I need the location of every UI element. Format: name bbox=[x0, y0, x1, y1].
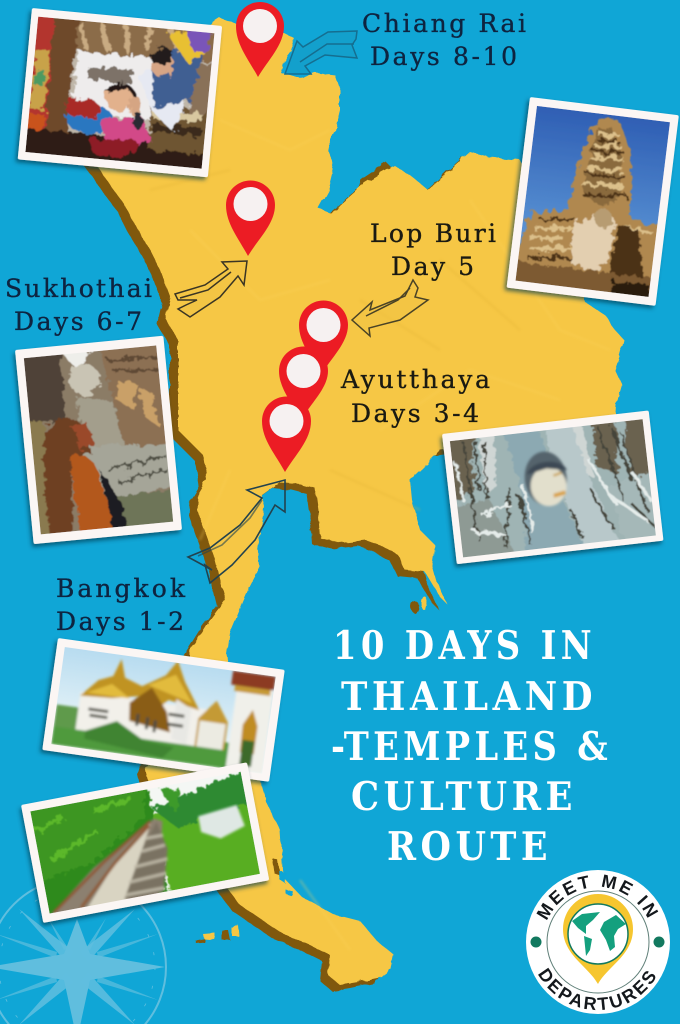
label: Sukhothai: Days 6-7 bbox=[14, 307, 142, 336]
map shadow bbox=[52, 24, 616, 991]
title: 10 DAYS IN bbox=[333, 623, 596, 669]
title: THAILAND bbox=[341, 674, 597, 720]
label: Bangkok: Days 1-2 bbox=[56, 607, 184, 636]
arrow: Sukhothai bbox=[175, 261, 247, 317]
compass rose bbox=[0, 878, 166, 1024]
label: Chiang Rai bbox=[362, 9, 526, 71]
logo: Meet Me in Departures bbox=[526, 870, 670, 1014]
title: -TEMPLES & bbox=[331, 724, 612, 770]
map of Thailand bbox=[52, 18, 624, 991]
label: Sukhothai: Sukhothai bbox=[5, 274, 152, 303]
label: Bangkok bbox=[56, 574, 186, 636]
photo: Death Railway through jungle bbox=[21, 762, 269, 923]
logo text: DEPARTURES bbox=[538, 968, 656, 1010]
photo: hill tribe child and woman bbox=[18, 8, 222, 177]
pin: Bangkok bbox=[262, 396, 311, 472]
label: Chiang Rai: Days 8-10 bbox=[370, 42, 517, 71]
label: Ayutthaya bbox=[340, 365, 490, 428]
photo: Buddha head in tree roots, Ayutthaya bbox=[442, 410, 663, 564]
label: Chiang Rai: Chiang Rai bbox=[362, 9, 526, 38]
title: CULTURE bbox=[351, 774, 577, 820]
pin: Sukhothai bbox=[226, 180, 275, 256]
title: ROUTE bbox=[387, 824, 552, 870]
label: Ayutthaya: Ayutthaya bbox=[340, 365, 490, 394]
photo: Grand Palace, Bangkok bbox=[42, 638, 285, 782]
label: Sukhothai bbox=[5, 274, 152, 336]
logo text bbox=[536, 874, 658, 1010]
pin: Chiang Rai bbox=[236, 2, 284, 77]
pin: Lop Buri bbox=[299, 300, 348, 375]
logo pin bbox=[563, 894, 633, 984]
paper creases bbox=[150, 120, 610, 950]
title bbox=[331, 623, 612, 870]
arrow: Chiang Rai bbox=[285, 31, 357, 74]
photo: woman and Sukhothai Buddha bbox=[15, 336, 182, 544]
label: Lop Buri: Day 5 bbox=[391, 252, 474, 281]
label: Lop Buri: Lop Buri bbox=[370, 219, 496, 248]
label: Bangkok: Bangkok bbox=[56, 574, 186, 603]
pin: Ayutthaya bbox=[279, 346, 328, 420]
map land bbox=[60, 18, 624, 985]
label: Ayutthaya: Days 3-4 bbox=[351, 399, 479, 428]
arrow: Lop Buri bbox=[352, 280, 428, 336]
logo text: MEET ME IN bbox=[536, 874, 658, 920]
label: Lop Buri bbox=[370, 219, 496, 281]
photo: Lop Buri temple with monkey bbox=[507, 97, 679, 306]
arrow: Bangkok bbox=[188, 480, 285, 583]
